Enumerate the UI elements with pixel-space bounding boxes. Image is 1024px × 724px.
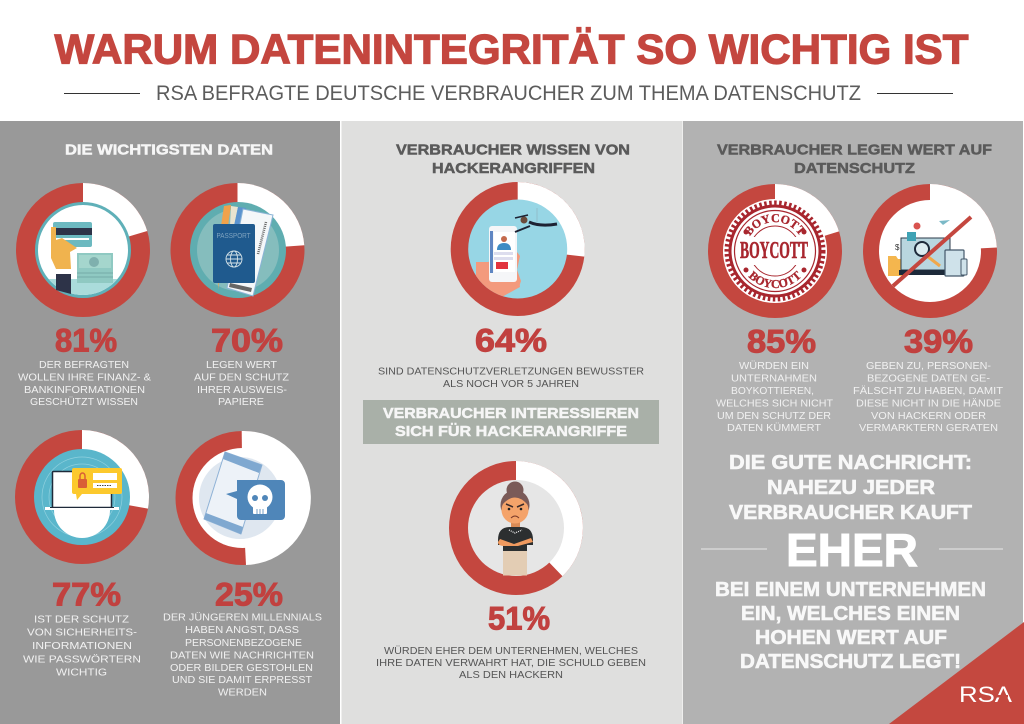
banner: verbraucher interessieren sich: VERBRAUCHER INTERESSIEREN	[383, 405, 639, 422]
stat 51%: ALS DEN HACKERN	[459, 670, 563, 681]
title: WARUM DATENINTEGRITÄT SO WICHTIG IST	[54, 26, 969, 72]
banner: verbraucher interessieren sich: SICH FÜR HACKERANGRIFFE	[395, 423, 627, 440]
stat 77%: VON SICHERHEITS-	[27, 628, 137, 638]
stat 51%: 51%	[488, 600, 550, 636]
stat 25%: 25%	[215, 576, 283, 612]
stat 77%: INFORMATIONEN	[32, 641, 132, 652]
stat 39%: FÄLSCHT ZU HABEN, DAMIT	[853, 385, 1003, 397]
donut 77% with laptop icon	[15, 430, 149, 564]
callout: die gute nachricht: DATENSCHUTZ LEGT!	[740, 651, 961, 673]
stat 39%: GEBEN ZU, PERSONEN-	[866, 361, 991, 372]
corner triangle with RSA logo: RSA	[959, 682, 1012, 707]
stat 70%: IHRER AUSWEIS-	[197, 385, 287, 396]
stat 51%: IHRE DATEN VERWAHRT HAT, DIE SCHULD GEBEN	[376, 658, 646, 669]
stat 64%: ALS NOCH VOR 5 JAHREN	[443, 379, 579, 390]
donut 70% with passport icon: PASSPORT	[216, 233, 251, 240]
stat 85%: 85%	[747, 324, 816, 360]
heading: verbraucher legen wert auf datenschutz: VERBRAUCHER LEGEN WERT AUF	[717, 142, 992, 158]
stat 70%: AUF DEN SCHUTZ	[194, 372, 289, 384]
stat 85%: DATEN KÜMMERT	[727, 422, 821, 434]
stat 70%: PAPIERE	[218, 397, 264, 408]
callout: die gute nachricht: DIE GUTE NACHRICHT:	[729, 452, 972, 474]
donut 85% with boycott seal	[708, 184, 842, 318]
subtitle: RSA BEFRAGTE DEUTSCHE VERBRAUCHER ZUM THEMA DATENSCHUTZ	[156, 82, 861, 105]
stat 39%: DIESE NICHT IN DIE HÄNDE	[856, 398, 1001, 410]
heading: verbraucher legen wert auf datenschutz	[717, 142, 992, 177]
stat 51%: WÜRDEN EHER DEM UNTERNEHMEN, WELCHES	[384, 645, 638, 657]
stat 81%	[18, 322, 151, 408]
donut 81% with card icon	[16, 183, 150, 317]
stat 64%: 64%	[475, 322, 547, 358]
stat 25%: DER JÜNGEREN MILLENNIALS	[163, 612, 322, 624]
donut 85% with boycott seal: BOYCOTT	[740, 238, 808, 264]
stat 51%	[376, 600, 646, 681]
panel: hackerangriffe	[342, 121, 682, 724]
stat 77%: 77%	[52, 576, 121, 612]
stat 25%	[163, 576, 322, 698]
stat 25%: ODER BILDER GESTOHLEN	[170, 663, 313, 674]
stat 77%: WIE PASSWÖRTERN	[23, 654, 141, 666]
stat 64%: SIND DATENSCHUTZVERLETZUNGEN BEWUSSTER	[378, 366, 644, 378]
donut 64% with phone and hacker icon	[451, 182, 585, 316]
stat 85%: BOYKOTTIEREN,	[731, 386, 814, 397]
callout: die gute nachricht: EIN, WELCHES EINEN	[741, 603, 960, 625]
donut 70% with passport icon	[170, 183, 304, 317]
stat 70%	[194, 322, 289, 408]
stat 39%: VON HACKERN ODER	[871, 411, 986, 422]
callout: die gute nachricht: NAHEZU JEDER	[767, 477, 936, 499]
heading: verbraucher legen wert auf datenschutz: DATENSCHUTZ	[794, 160, 915, 177]
stat 64%	[378, 322, 644, 390]
stat 81%: BANKINFORMATIONEN	[24, 385, 145, 396]
callout: die gute nachricht	[701, 452, 1003, 673]
callout: die gute nachricht: VERBRAUCHER KAUFT	[729, 502, 972, 524]
callout: die gute nachricht: HOHEN WERT AUF	[755, 627, 947, 649]
callout: die gute nachricht: EHER	[786, 524, 918, 576]
stat 39%: 39%	[904, 324, 973, 360]
panel: die wichtigsten daten	[0, 121, 340, 724]
stat 81%: 81%	[55, 322, 117, 358]
corner triangle with RSA logo	[889, 622, 1024, 724]
stat 77%	[23, 576, 141, 678]
stat 81%: WOLLEN IHRE FINANZ- &	[18, 372, 151, 384]
stat 85%: WELCHES SICH NICHT	[716, 398, 833, 410]
donut 51% with angry woman icon	[449, 461, 583, 595]
heading: verbraucher wissen von hackerangriffen: HACKERANGRIFFEN	[432, 160, 595, 177]
stat 70%: 70%	[211, 322, 283, 358]
stat 25%: UND SIE DAMIT ERPRESST	[172, 675, 312, 686]
donut 39% with crossed-out devices: $	[895, 243, 900, 252]
panel: datenschutz	[683, 121, 1023, 724]
heading: verbraucher wissen von hackerangriffen: VERBRAUCHER WISSEN VON	[396, 142, 630, 158]
stat 85%: WÜRDEN EIN	[739, 360, 809, 372]
stat 25%: PERSONENBEZOGENE	[185, 638, 302, 649]
banner: verbraucher interessieren sich	[363, 400, 659, 444]
stat 25%: DATEN WIE NACHRICHTEN	[170, 650, 314, 662]
stat 70%: LEGEN WERT	[206, 360, 277, 371]
callout: die gute nachricht: BEI EINEM UNTERNEHMEN	[715, 579, 986, 601]
stat 81%: DER BEFRAGTEN	[39, 360, 129, 371]
stat 25%: WERDEN	[218, 688, 267, 698]
stat 25%: HABEN ANGST, DASS	[185, 625, 299, 636]
stat 85%: UM DEN SCHUTZ DER	[717, 411, 831, 422]
donut 85% with boycott seal: BOYCOTT	[748, 270, 801, 288]
stat 77%: WICHTIG	[56, 668, 107, 678]
donut 39% with crossed-out devices	[863, 184, 997, 318]
heading: verbraucher wissen von hackerangriffen	[396, 142, 630, 177]
stat 39%: BEZOGENE DATEN GE-	[867, 374, 990, 384]
stat 39%	[853, 324, 1003, 434]
stat 81%: GESCHÜTZT WISSEN	[30, 396, 138, 408]
stat 39%: VERMARKTERN GERATEN	[859, 423, 998, 434]
stat 77%: IST DER SCHUTZ	[34, 614, 129, 626]
donut 85% with boycott seal: BOYCOTT	[744, 214, 806, 236]
donut 25% with phone and skull icon	[176, 431, 311, 565]
stat 85%: UNTERNAHMEN	[731, 374, 817, 384]
heading: die wichtigsten daten: DIE WICHTIGSTEN DATEN	[65, 142, 273, 158]
stat 85%	[716, 324, 833, 434]
